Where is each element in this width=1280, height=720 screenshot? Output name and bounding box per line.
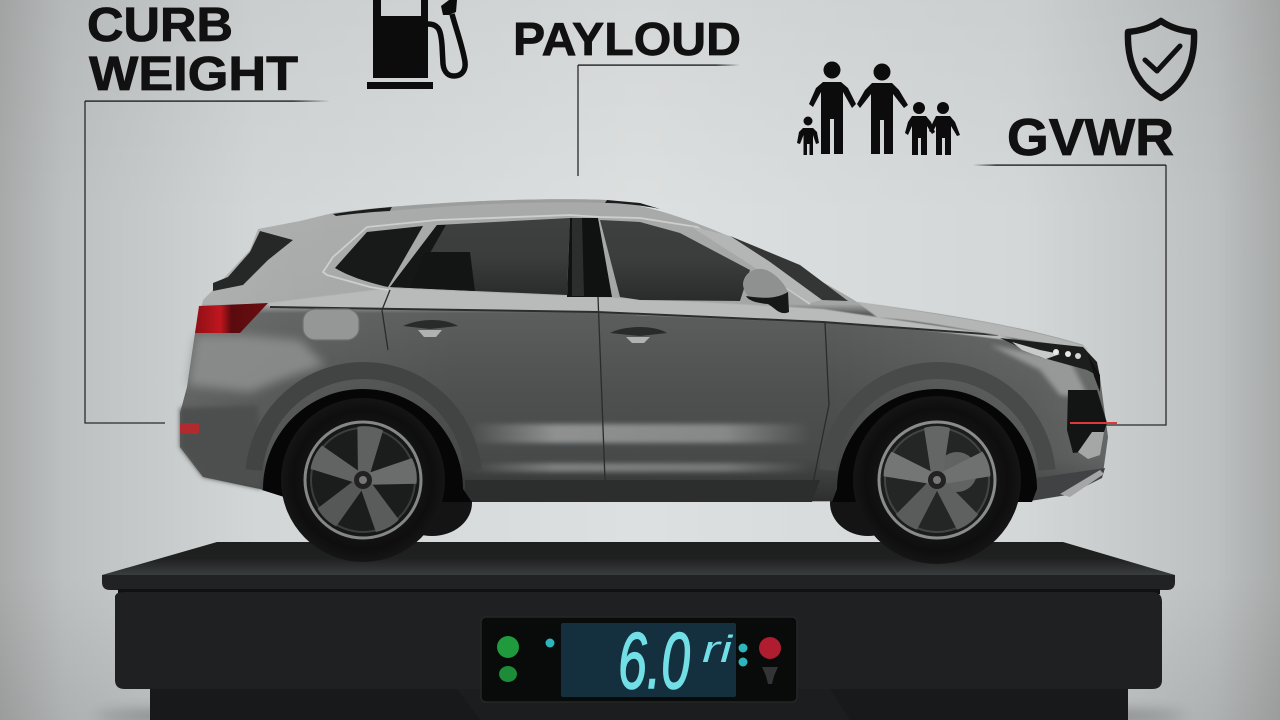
windshield [730,236,848,301]
platform base [115,592,1162,689]
front air intake [1067,390,1117,459]
label: curb weight: CURB [87,0,233,52]
label: curb weight [87,0,298,101]
status indicator grey [762,667,778,684]
label: GVWR: GVWR [1007,109,1174,167]
label: curb weight: WEIGHT [89,48,298,101]
platform floor shadow [95,706,1185,720]
front fender highlight [990,345,1090,400]
icon: family of people [797,62,960,155]
pillar [567,218,612,297]
scale display panel [481,616,797,705]
person: child one [905,102,935,155]
roof rail [333,199,660,216]
rear hatch window [213,231,293,291]
rear wheel arch [254,370,473,502]
connector line: curb weight to rear of car [85,100,330,423]
status indicator green lower [499,666,517,682]
front wheel arch [828,370,1047,502]
front wheel [853,396,1021,564]
rear quarter lighter panel [188,335,325,392]
status indicator green upper [497,636,519,658]
platform foot [150,689,1128,720]
person: adult one [809,62,856,154]
indicator dots [546,638,748,666]
weight reading: 6.0 [618,616,690,705]
weight reading unit: ri [702,629,734,671]
person: child two [929,102,960,155]
window chrome trim [323,215,810,304]
icon: shield with check mark [1128,21,1194,98]
rear seat silhouette [410,252,475,291]
car [180,199,1117,564]
front door window [600,220,750,301]
A pillar [690,226,822,303]
bumper reflector [180,423,199,434]
front lower bumper [1036,468,1105,500]
tail light [195,303,268,333]
connector line: payload to roof [578,64,740,176]
connector line: GVWR to front of car [973,164,1166,425]
weighing platform [95,542,1185,720]
display screen [561,623,736,697]
platform top surface [102,542,1175,575]
side sill [465,480,820,502]
fuel door [303,309,359,340]
rear lower bumper shading [180,405,262,489]
body highlight strips [470,424,810,443]
door mirror [743,269,789,313]
car body [180,199,1108,502]
door handle rear [403,320,458,337]
person: adult two [857,64,908,154]
rear quarter window [335,226,423,287]
door seams [382,290,829,483]
label: payload: PAYLOUD [513,13,741,65]
platform lip [102,575,1175,590]
far side wheels [392,470,906,536]
status indicator red [759,637,781,659]
icon: fuel pump [367,0,465,89]
door handle front [610,327,667,343]
hood [857,302,1088,350]
rear wheel [281,398,445,562]
person: small child [797,116,819,155]
rear door window [390,218,570,295]
shoulder highlight band [268,288,1020,342]
headlight [1000,338,1100,392]
body side sheen [180,199,1108,502]
